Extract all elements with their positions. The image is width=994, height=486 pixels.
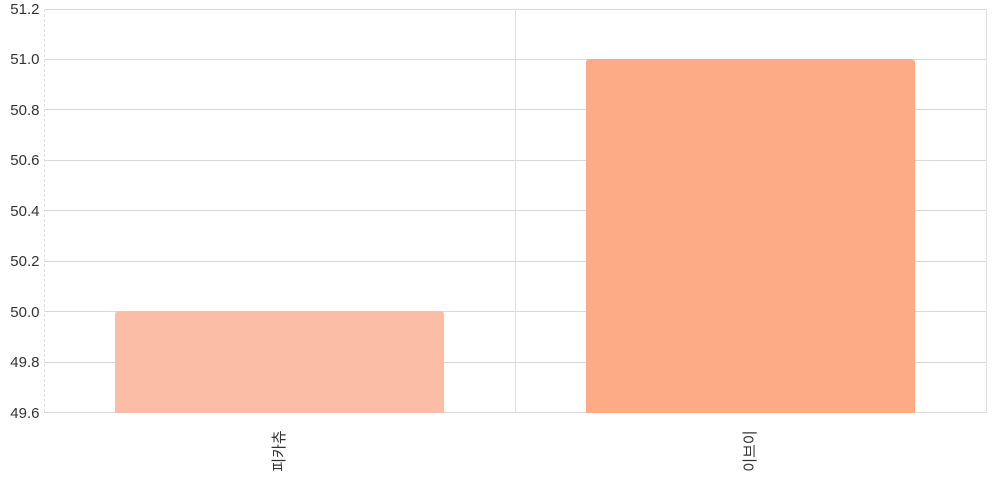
y axis labels: 50.8 [10,102,40,119]
bar: 피카츄 [115,311,444,413]
x axis label: 피카츄: 피카츄 [271,430,288,472]
y axis labels: 51.2 [10,1,40,18]
y axis labels: 50.2 [10,253,40,270]
x axis label: 이브이: 이브이 [742,430,759,472]
y axis labels: 49.6 [10,405,40,422]
y axis labels: 50.4 [10,203,40,220]
y axis labels [10,1,40,422]
y axis labels: 49.8 [10,354,40,371]
y axis labels: 50.0 [10,304,40,321]
bar: 이브이 [586,59,915,413]
y axis labels: 50.6 [10,152,40,169]
y axis labels: 51.0 [10,51,40,68]
